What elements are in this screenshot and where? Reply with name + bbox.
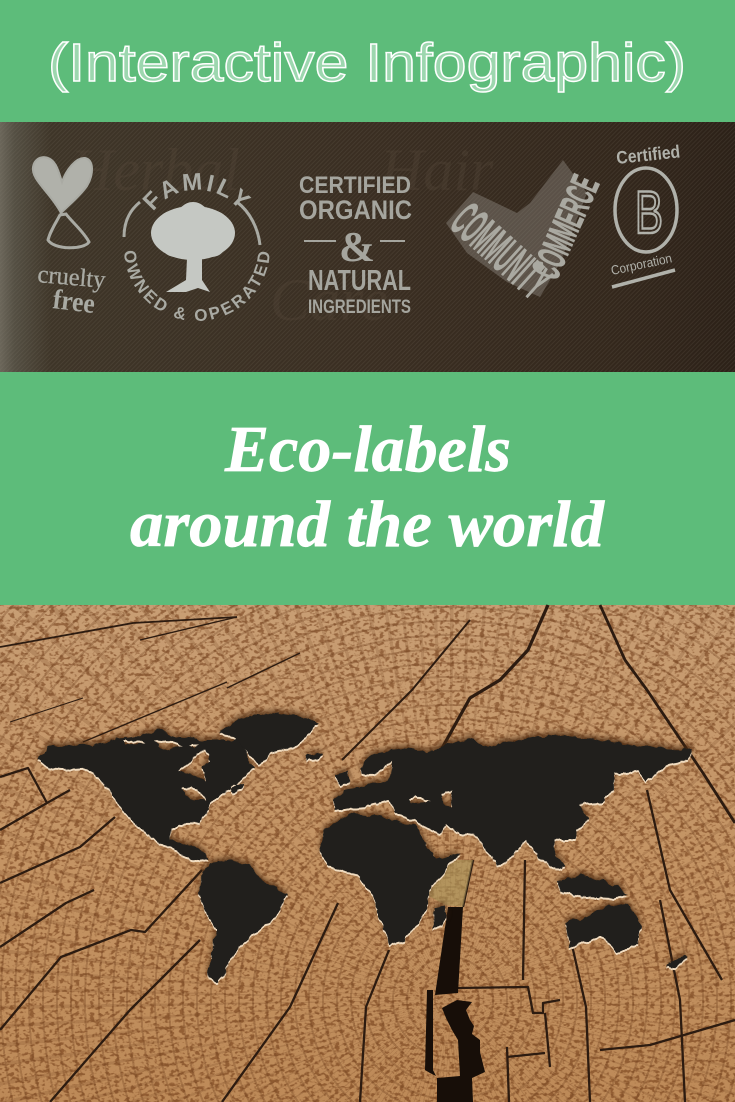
label: certified organic and natural: INGREDIENTS [308, 297, 411, 318]
south america [199, 860, 286, 983]
label: certified b corporation [610, 141, 681, 287]
faint script on fabric: Herbal [69, 137, 240, 203]
photo: eco labels on fabric: COMMUNITY [441, 193, 561, 309]
label: cruelty free: free [51, 284, 97, 320]
photo: world map carved in wood [0, 605, 735, 1102]
label: community commerce heart [446, 160, 600, 298]
wood cracks [0, 605, 735, 1102]
madagascar [434, 905, 446, 928]
label: cruelty free: cruelty [36, 261, 107, 294]
faint script on fabric [294, 150, 494, 320]
label: cruelty free [33, 157, 107, 320]
indonesia [558, 875, 628, 898]
iceland [305, 753, 324, 761]
heading: eco-labels around the world [130, 413, 605, 561]
new zealand [666, 953, 687, 968]
icon: tree [151, 202, 235, 292]
label: certified organic and natural: NATURAL [308, 265, 411, 297]
photo: eco labels on fabric [0, 122, 735, 372]
yellow wood patch [427, 860, 473, 907]
heading: eco-labels around the world: around the world [130, 488, 605, 561]
label: certified b corporation: Corporation [610, 250, 673, 278]
label: community commerce heart: COMMERCE [524, 169, 608, 286]
label: family owned and operated: OWNED & OPERATED [124, 250, 270, 321]
title: interactive infographic: (Interactive Infographic) [48, 33, 686, 93]
wood growth rings [0, 605, 735, 1102]
label: certified organic and natural: & [339, 225, 375, 271]
label: family owned and operated: FAMILY [142, 173, 252, 210]
britain [335, 772, 349, 785]
faint script on fabric: Care [270, 267, 388, 333]
africa [319, 813, 460, 945]
central deep crack [425, 907, 485, 1102]
wood fleck texture [0, 605, 735, 1102]
world map [38, 712, 692, 983]
greenland [218, 712, 319, 765]
label: certified organic and natural [299, 172, 412, 318]
label: certified b corporation: B [635, 179, 663, 246]
label: certified b corporation: Certified [615, 141, 681, 168]
north america [38, 730, 256, 862]
heading: eco-labels around the world: Eco-labels [224, 413, 511, 486]
eurasia [333, 735, 692, 870]
faint script on fabric: Hair [379, 137, 494, 203]
label: certified organic and natural: CERTIFIED [299, 172, 411, 199]
label: certified organic and natural: ORGANIC [299, 195, 412, 225]
label: family owned and operated [122, 173, 270, 321]
australia [565, 903, 640, 952]
